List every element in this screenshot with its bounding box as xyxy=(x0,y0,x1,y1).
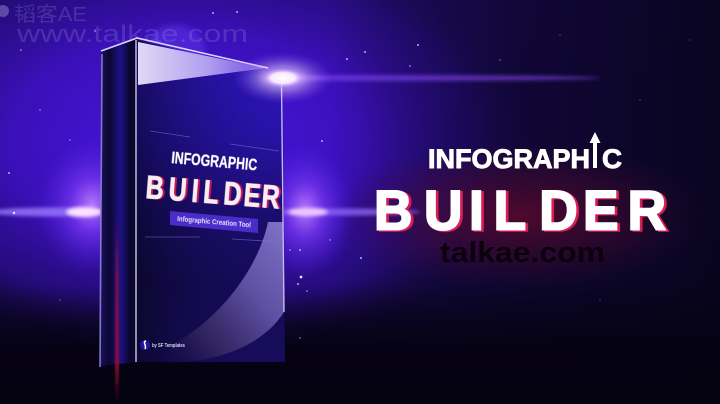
box spine left edge xyxy=(100,54,102,367)
box logo: by SF Templates xyxy=(152,343,185,349)
title: infographic: INFOGRAPH xyxy=(428,144,590,174)
lens flare xyxy=(233,52,333,104)
box spine red stripe xyxy=(115,210,119,400)
box front face xyxy=(137,39,285,362)
title: infographic xyxy=(428,132,622,174)
product box xyxy=(100,38,285,400)
title: builder: BUILDER xyxy=(374,179,666,242)
box label: builder shadow: BUILDER xyxy=(146,170,283,216)
box label: infographic: INFOGRAPHIC xyxy=(171,148,258,174)
watermark: talkae.com: talkae.com xyxy=(440,237,605,269)
box spine xyxy=(100,39,137,366)
watermark: top left xyxy=(0,3,248,48)
box right edge xyxy=(282,82,284,312)
light glows around the box xyxy=(0,25,600,278)
red glow behind title xyxy=(330,140,710,290)
title: builder: BUILDER xyxy=(376,180,669,243)
title arrow xyxy=(590,132,600,168)
box top reflection xyxy=(138,42,266,85)
box label: pill xyxy=(170,211,258,233)
box front left edge xyxy=(135,40,137,362)
title: infographic: C xyxy=(602,144,622,174)
box label: tagline: Infographic Creation Tool xyxy=(177,214,251,229)
watermark: top left: 韬客AE xyxy=(14,3,87,26)
box label: builder: BUILDER xyxy=(144,170,281,216)
box face rules xyxy=(145,131,283,242)
box top edge xyxy=(101,38,268,68)
stars xyxy=(8,11,691,339)
box logo xyxy=(140,340,185,350)
box swoosh highlight xyxy=(165,222,284,363)
watermark: top left: www.talkae.com xyxy=(16,21,248,48)
